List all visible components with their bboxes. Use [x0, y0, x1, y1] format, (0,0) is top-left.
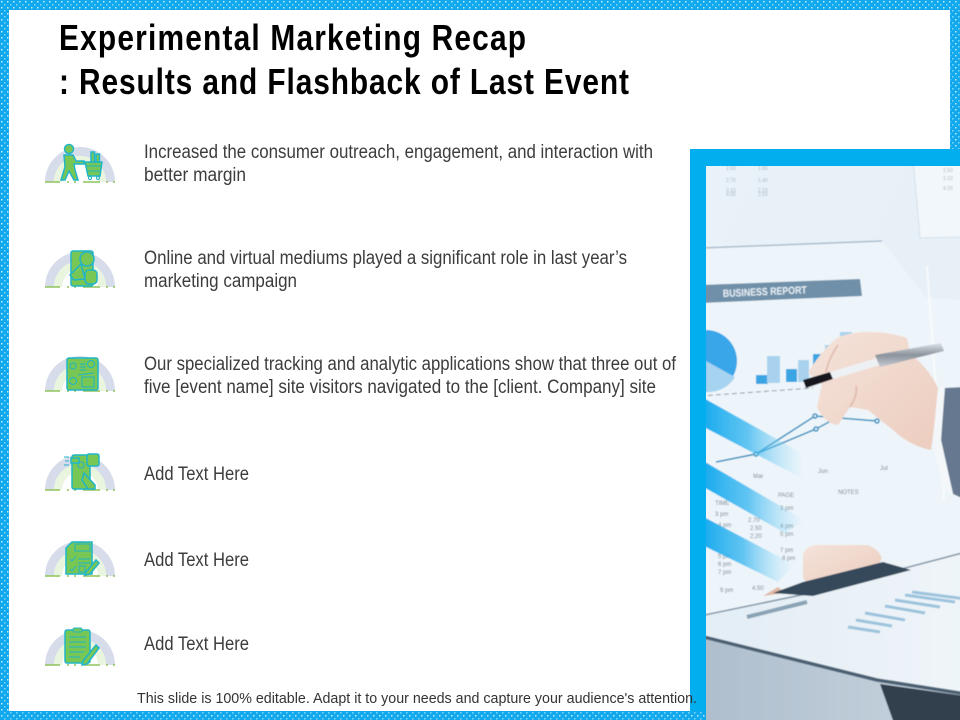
list item 5: [45, 541, 249, 576]
data table: 2.50: [750, 526, 762, 532]
data table: Mar: [753, 474, 763, 480]
line chart: [716, 414, 879, 462]
report heading bar: [700, 279, 862, 303]
icon: analytics board: [45, 356, 115, 391]
text: item 4: Add Text Here: [144, 464, 249, 485]
data table: 9 pm: [720, 588, 733, 594]
text: item 2: marketing campaign: [144, 271, 297, 292]
text: item 1: [144, 142, 653, 186]
data table: 4 pm: [718, 523, 731, 529]
text: item 6: Add Text Here: [144, 634, 249, 655]
pie chart: [706, 330, 738, 393]
data table: 2.70: [748, 518, 760, 524]
bar chart: [756, 332, 852, 384]
panel: blue photo frame: [690, 149, 960, 720]
writing hand: [808, 332, 938, 450]
data table: 3 pm: [715, 512, 728, 518]
data table: 5 pm: [780, 532, 793, 538]
photo: business report and hands: [706, 166, 960, 720]
report heading bar: BUSINESS REPORT: [723, 284, 808, 300]
data table: Jul: [880, 466, 888, 472]
text: item 1: Increased the consumer outreach, engagement, and interaction with: [144, 142, 653, 163]
text: item 3: five [event name] site visitors navigated to the [client. Company] site: [144, 377, 656, 398]
blue diagonal stripes: [706, 398, 799, 582]
text: item 3: Our specialized tracking and analytic applications show that three out of: [144, 354, 677, 375]
icon: clipboard and pencil: [45, 628, 115, 665]
data table: 6 pm: [718, 562, 731, 568]
data table: 7 pm: [780, 548, 793, 554]
faint top table: 2.50: [943, 168, 953, 174]
list item 6: [45, 628, 249, 665]
data table: 8 pm: [782, 556, 795, 562]
title: [59, 18, 629, 103]
icon: mobile with discount: [45, 251, 115, 287]
title: Experimental Marketing Recap: [59, 18, 526, 59]
footer note: This slide is 100% editable. Adapt it to your needs and capture your audience's attention.: [137, 690, 697, 707]
data table: 2.20: [750, 534, 762, 540]
data table: 5 pm: [718, 554, 731, 560]
faint top table: 2.70: [726, 178, 736, 184]
text: item 2: [144, 248, 627, 292]
faint top table: 2.50: [758, 192, 768, 198]
data table: [715, 466, 888, 594]
data table: PAGE: [778, 493, 794, 499]
icon: checklist document: [45, 541, 115, 576]
faint top table: 2.50: [726, 166, 736, 172]
faint top table: [726, 166, 953, 198]
text: item 3: [144, 354, 677, 398]
data table: 4.50: [752, 586, 764, 592]
faint top table: 3.10: [726, 188, 736, 194]
tablet: [700, 552, 960, 720]
data table: Jun: [818, 469, 828, 475]
faint top table: 2.20: [758, 188, 768, 194]
faint top table: 1.40: [758, 178, 768, 184]
data table: 3 pm: [780, 506, 793, 512]
list item 1: [45, 142, 653, 186]
sleeve and cuff: [940, 386, 960, 498]
phone and lower hand: [763, 545, 911, 596]
data table: TIME: [715, 501, 729, 507]
data table: 4 pm: [780, 524, 793, 530]
icon: shopper with cart: [45, 144, 115, 182]
faint top table: 3.10: [943, 176, 953, 182]
icon: mobile with star: [45, 454, 115, 490]
faint top table: 1.80: [758, 166, 768, 172]
list item 2: [45, 248, 627, 292]
list item 3: [45, 354, 677, 398]
data table: 7 pm: [718, 570, 731, 576]
text: item 5: Add Text Here: [144, 550, 249, 571]
text: item 1: better margin: [144, 165, 246, 186]
pen: [803, 343, 944, 388]
faint top table: 4.00: [726, 192, 736, 198]
title: : Results and Flashback of Last Event: [59, 62, 629, 103]
text: item 2: Online and virtual mediums played a significant role in last year’s: [144, 248, 627, 269]
list item 4: [45, 454, 249, 490]
faint top table: 4.20: [943, 186, 953, 192]
data table: NOTES: [838, 490, 859, 496]
